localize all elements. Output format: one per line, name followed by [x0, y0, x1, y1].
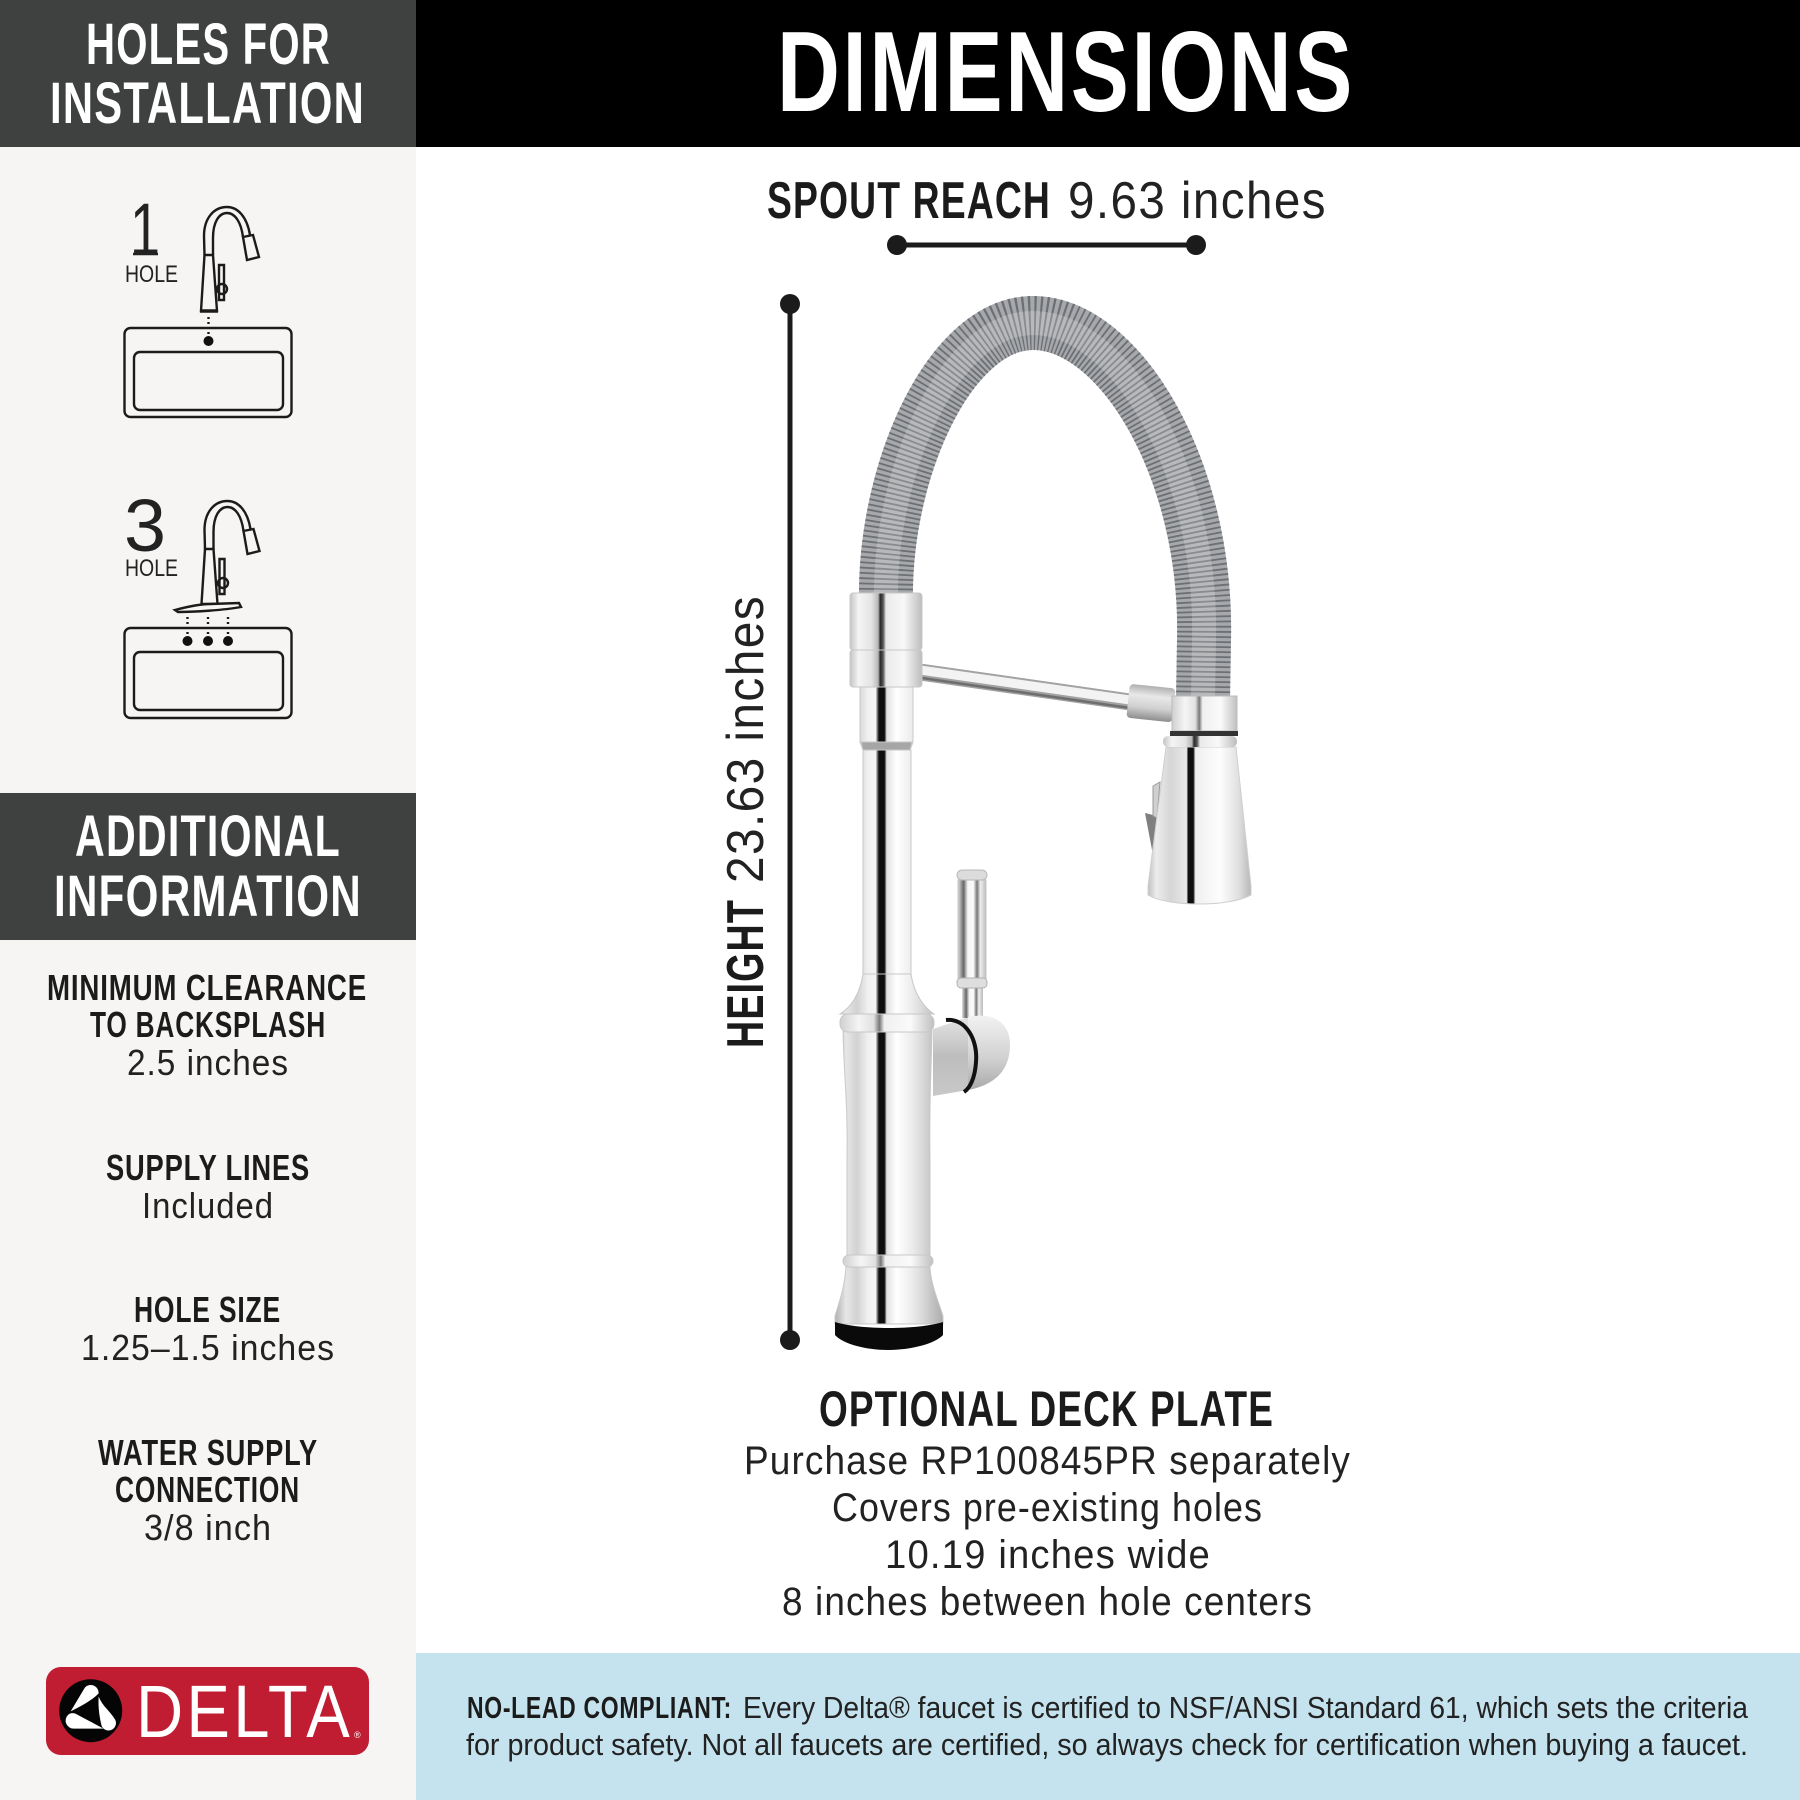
dimension: spout reach: SPOUT REACH: [767, 172, 1051, 230]
heading: holes for installation: [0, 0, 416, 147]
panel: no-lead compliant note: NO-LEAD COMPLIANT:: [467, 1690, 732, 1725]
heading: dimensions: DIMENSIONS: [777, 9, 1355, 136]
faucet illustration: [835, 323, 1251, 1350]
text: optional deck plate: Purchase RP100845PR separately: [744, 1439, 1351, 1483]
icon: 3 hole installation: [124, 484, 292, 718]
heading: additional information: [0, 793, 416, 940]
text: optional deck plate: Covers pre-existing holes: [832, 1486, 1263, 1530]
logo: delta: DELTA: [136, 1670, 353, 1753]
heading: additional information: INFORMATION: [54, 864, 362, 929]
heading: holes for installation: HOLES FOR: [86, 12, 331, 77]
dimension: spout reach: [767, 172, 1327, 255]
heading: dimensions: [416, 0, 1800, 147]
panel: no-lead compliant note: [416, 1653, 1800, 1800]
text: supply lines: SUPPLY LINES: [106, 1147, 310, 1188]
text: hole size: HOLE SIZE: [134, 1289, 281, 1330]
spout support bar: [906, 668, 1130, 708]
dimension: height: 23.63 inches: [717, 595, 775, 883]
text: optional deck plate: [744, 1381, 1351, 1624]
panel: left sidebar: [0, 0, 416, 1800]
dimension: spout reach: 9.63 inches: [1068, 172, 1327, 230]
icon: 3 hole installation: HOLE: [125, 555, 178, 582]
text: water supply connection: WATER SUPPLY: [98, 1432, 318, 1473]
deck base: [835, 1322, 943, 1350]
main riser: [835, 593, 943, 1324]
heading: holes for installation: INSTALLATION: [50, 71, 365, 136]
icon: 1 hole installation: HOLE: [125, 261, 178, 288]
spring hose: [886, 323, 1204, 700]
text: optional deck plate: OPTIONAL DECK PLATE: [819, 1381, 1274, 1437]
text: minimum clearance: 2.5 inches: [127, 1042, 289, 1083]
text: water supply connection: [98, 1432, 318, 1548]
spray head: [1126, 684, 1251, 904]
handle: [933, 870, 1010, 1096]
logo: delta: [46, 1667, 369, 1755]
heading: additional information: ADDITIONAL: [75, 804, 341, 869]
text: supply lines: [106, 1147, 310, 1226]
text: hole size: 1.25–1.5 inches: [81, 1327, 335, 1368]
icon: 3 hole installation: 3: [124, 484, 166, 567]
text: water supply connection: 3/8 inch: [144, 1507, 272, 1548]
text: optional deck plate: 8 inches between hole centers: [782, 1580, 1313, 1624]
dimension: height: HEIGHT: [717, 899, 775, 1048]
text: hole size: [81, 1289, 335, 1368]
text: minimum clearance: [47, 967, 367, 1083]
text: water supply connection: CONNECTION: [115, 1469, 300, 1510]
text: minimum clearance: MINIMUM CLEARANCE: [47, 967, 367, 1008]
icon: 1 hole installation: [124, 188, 292, 417]
text: optional deck plate: 10.19 inches wide: [885, 1533, 1211, 1577]
dimension: height: [717, 294, 800, 1350]
icon: 1 hole installation: 1: [130, 188, 160, 271]
logo: delta: ®: [354, 1730, 361, 1740]
text: minimum clearance: TO BACKSPLASH: [90, 1004, 326, 1045]
text: supply lines: Included: [142, 1185, 274, 1226]
